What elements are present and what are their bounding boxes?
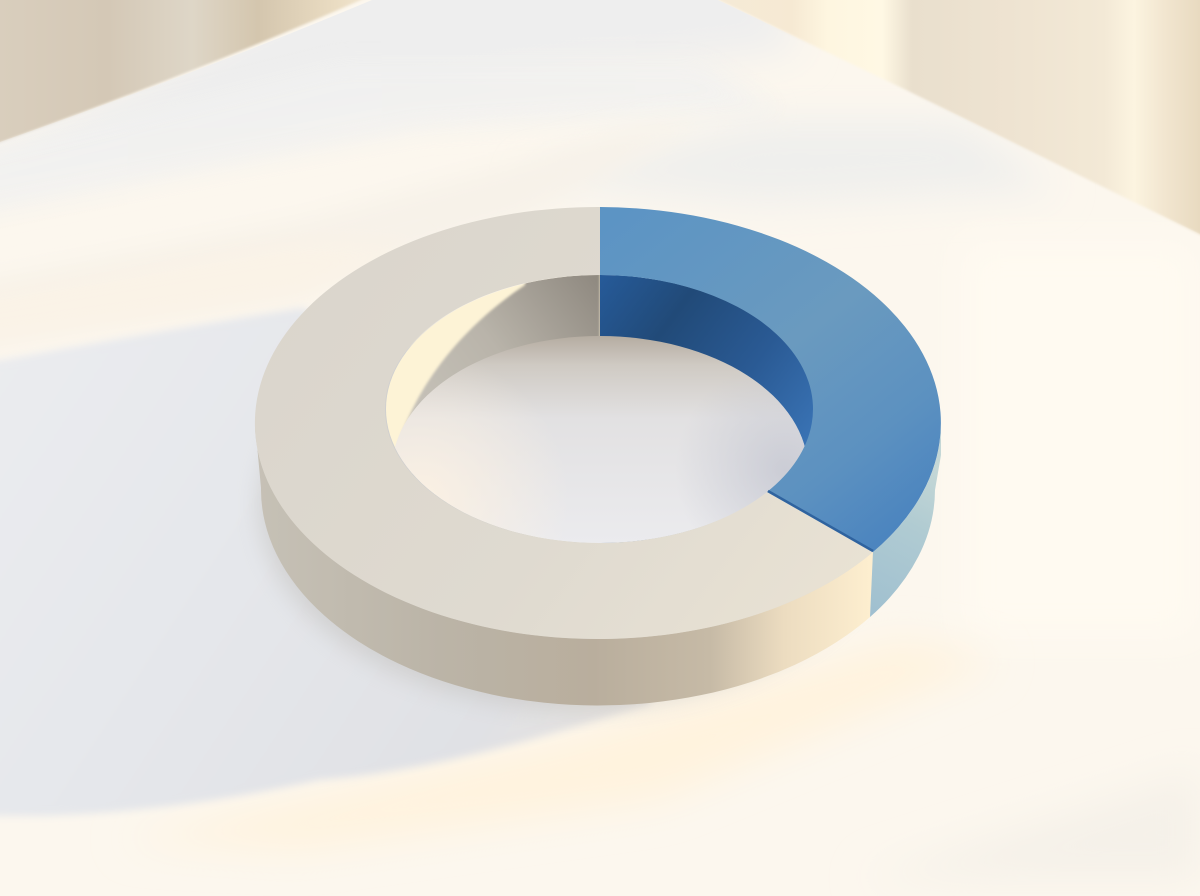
- inner wall: lit cream rim: [380, 270, 600, 550]
- outer side wall: blue segment: [870, 423, 941, 617]
- top face: blue segment (share of ring): [600, 207, 941, 552]
- hole: inner walls and floor: [386, 275, 813, 543]
- table surface: far edge: [0, 0, 1200, 420]
- light and shadow streaks on table: [0, 0, 1009, 848]
- inner wall: blue segment: [600, 270, 820, 550]
- hole floor: [395, 336, 804, 543]
- background: curtained wall: [0, 0, 1200, 300]
- outer side wall: grey segment: [255, 423, 873, 705]
- contact shadow under donut: [260, 302, 890, 708]
- top face: grey segment (share of ring): [255, 207, 873, 639]
- dark edge along blue cut: [768, 491, 873, 551]
- donut chart: [255, 207, 941, 705]
- inner wall: shaded grey segment: [404, 275, 600, 424]
- cast shadow of the donut: [0, 308, 650, 816]
